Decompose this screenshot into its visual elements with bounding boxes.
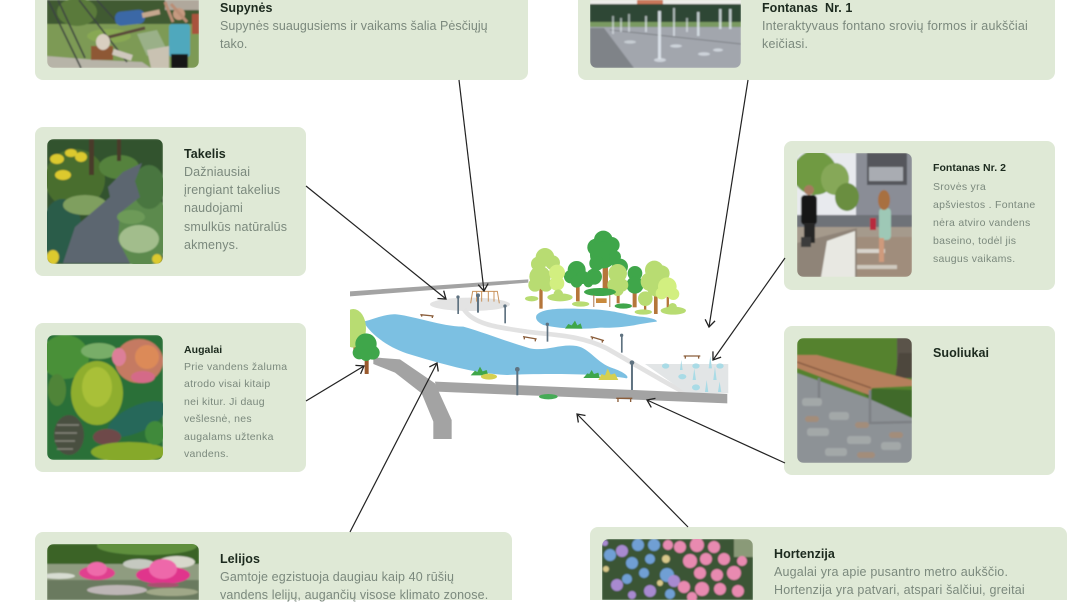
description: saugus vaikams. xyxy=(933,253,1015,265)
heading: Augalai xyxy=(184,344,222,356)
description xyxy=(184,361,288,460)
photo: fountain xyxy=(590,0,741,68)
description: Supynės suaugusiems ir vaikams šalia Pėsčiųjų xyxy=(220,19,488,33)
heading: Fontanas Nr. 1 xyxy=(762,1,852,15)
photo: waterside plants xyxy=(47,335,163,460)
description: vandens. xyxy=(184,448,229,460)
left trees xyxy=(350,309,380,374)
small pond xyxy=(536,309,657,329)
swings xyxy=(471,291,499,303)
arrow: Supynės to swings xyxy=(459,80,484,291)
description: vandens lelijų, augančių visose klimato zonose. xyxy=(220,588,488,602)
photo: hydrangeas xyxy=(602,539,753,600)
arrow: Fontanas Nr. 2 to fountains xyxy=(713,258,785,360)
park map illustration xyxy=(350,230,728,439)
description xyxy=(762,19,1028,51)
description xyxy=(933,181,1036,265)
panel: Augalai xyxy=(35,323,306,472)
photo: park bench xyxy=(797,338,912,463)
description: Srovės yra xyxy=(933,181,986,193)
description: keičiasi. xyxy=(762,37,808,51)
description: Augalai yra apie pusantro metro aukščio. xyxy=(774,565,1008,579)
photo: children at fountain xyxy=(797,153,912,277)
description: Prie vandens žaluma xyxy=(184,361,287,373)
description: naudojami xyxy=(184,201,243,215)
description: Gamtoje egzistuoja daugiau kaip 40 rūšių xyxy=(220,570,454,584)
swing area xyxy=(430,298,510,311)
photo: water lilies xyxy=(47,544,199,600)
description: smulkūs natūralūs xyxy=(184,220,287,234)
arrow: Augalai to trees xyxy=(306,366,364,401)
description: augalams užtenka xyxy=(184,431,274,443)
grass tufts xyxy=(471,321,618,399)
upper road xyxy=(350,279,528,296)
heading: Hortenzija xyxy=(774,547,835,561)
arrow: Suoliukai to bench xyxy=(647,400,785,463)
panel: Fontanas Nr. 2 xyxy=(784,141,1055,290)
panel: Supynės xyxy=(35,0,528,80)
panel: Suoliukai xyxy=(784,326,1055,475)
description: baseino, todėl jis xyxy=(933,235,1016,247)
arrow: Hortenzija to park xyxy=(577,414,688,527)
gazebo swing xyxy=(584,288,616,307)
heading: Takelis xyxy=(184,147,226,161)
big pond xyxy=(363,314,628,378)
arrow: Lelijos to pond xyxy=(350,363,437,532)
arrow: Takelis to path xyxy=(306,186,446,299)
panel: Lelijos xyxy=(35,532,512,600)
description: tako. xyxy=(220,37,247,51)
panel: Fontanas Nr. 1 xyxy=(578,0,1055,80)
panel: Hortenzija xyxy=(590,527,1067,600)
description: Hortenzija yra patvari, atspari šalčiui, greitai xyxy=(774,583,1025,597)
description: įrengiant takelius xyxy=(184,183,280,197)
description xyxy=(220,19,488,51)
description xyxy=(220,570,488,602)
description: nėra atviro vandens xyxy=(933,217,1031,229)
lamps xyxy=(456,293,634,395)
description xyxy=(184,165,287,252)
description xyxy=(774,565,1025,597)
heading: Fontanas Nr. 2 xyxy=(933,162,1006,174)
benches xyxy=(420,315,700,402)
heading: Supynės xyxy=(220,1,272,15)
description: Dažniausiai xyxy=(184,165,250,179)
description: atrodo visai kitaip xyxy=(184,378,270,390)
panel: Takelis xyxy=(35,127,306,276)
winding footpath xyxy=(464,309,685,393)
photo: swings xyxy=(47,0,199,68)
description: akmenys. xyxy=(184,238,239,252)
description: Interaktyvaus fontano srovių formos ir aukščiai xyxy=(762,19,1028,33)
heading: Suoliukai xyxy=(933,346,989,360)
fountain plaza xyxy=(645,356,728,393)
arrow: Fontanas Nr. 1 to plaza xyxy=(709,80,748,327)
description: vešlesnė, nes xyxy=(184,413,252,425)
description: nei kitur. Ji daug xyxy=(184,396,265,408)
branch road xyxy=(373,357,452,439)
tree group xyxy=(525,231,686,315)
heading: Lelijos xyxy=(220,552,260,566)
photo: garden path xyxy=(47,139,163,264)
main road xyxy=(435,382,727,403)
description: apšviestos . Fontane xyxy=(933,199,1036,211)
